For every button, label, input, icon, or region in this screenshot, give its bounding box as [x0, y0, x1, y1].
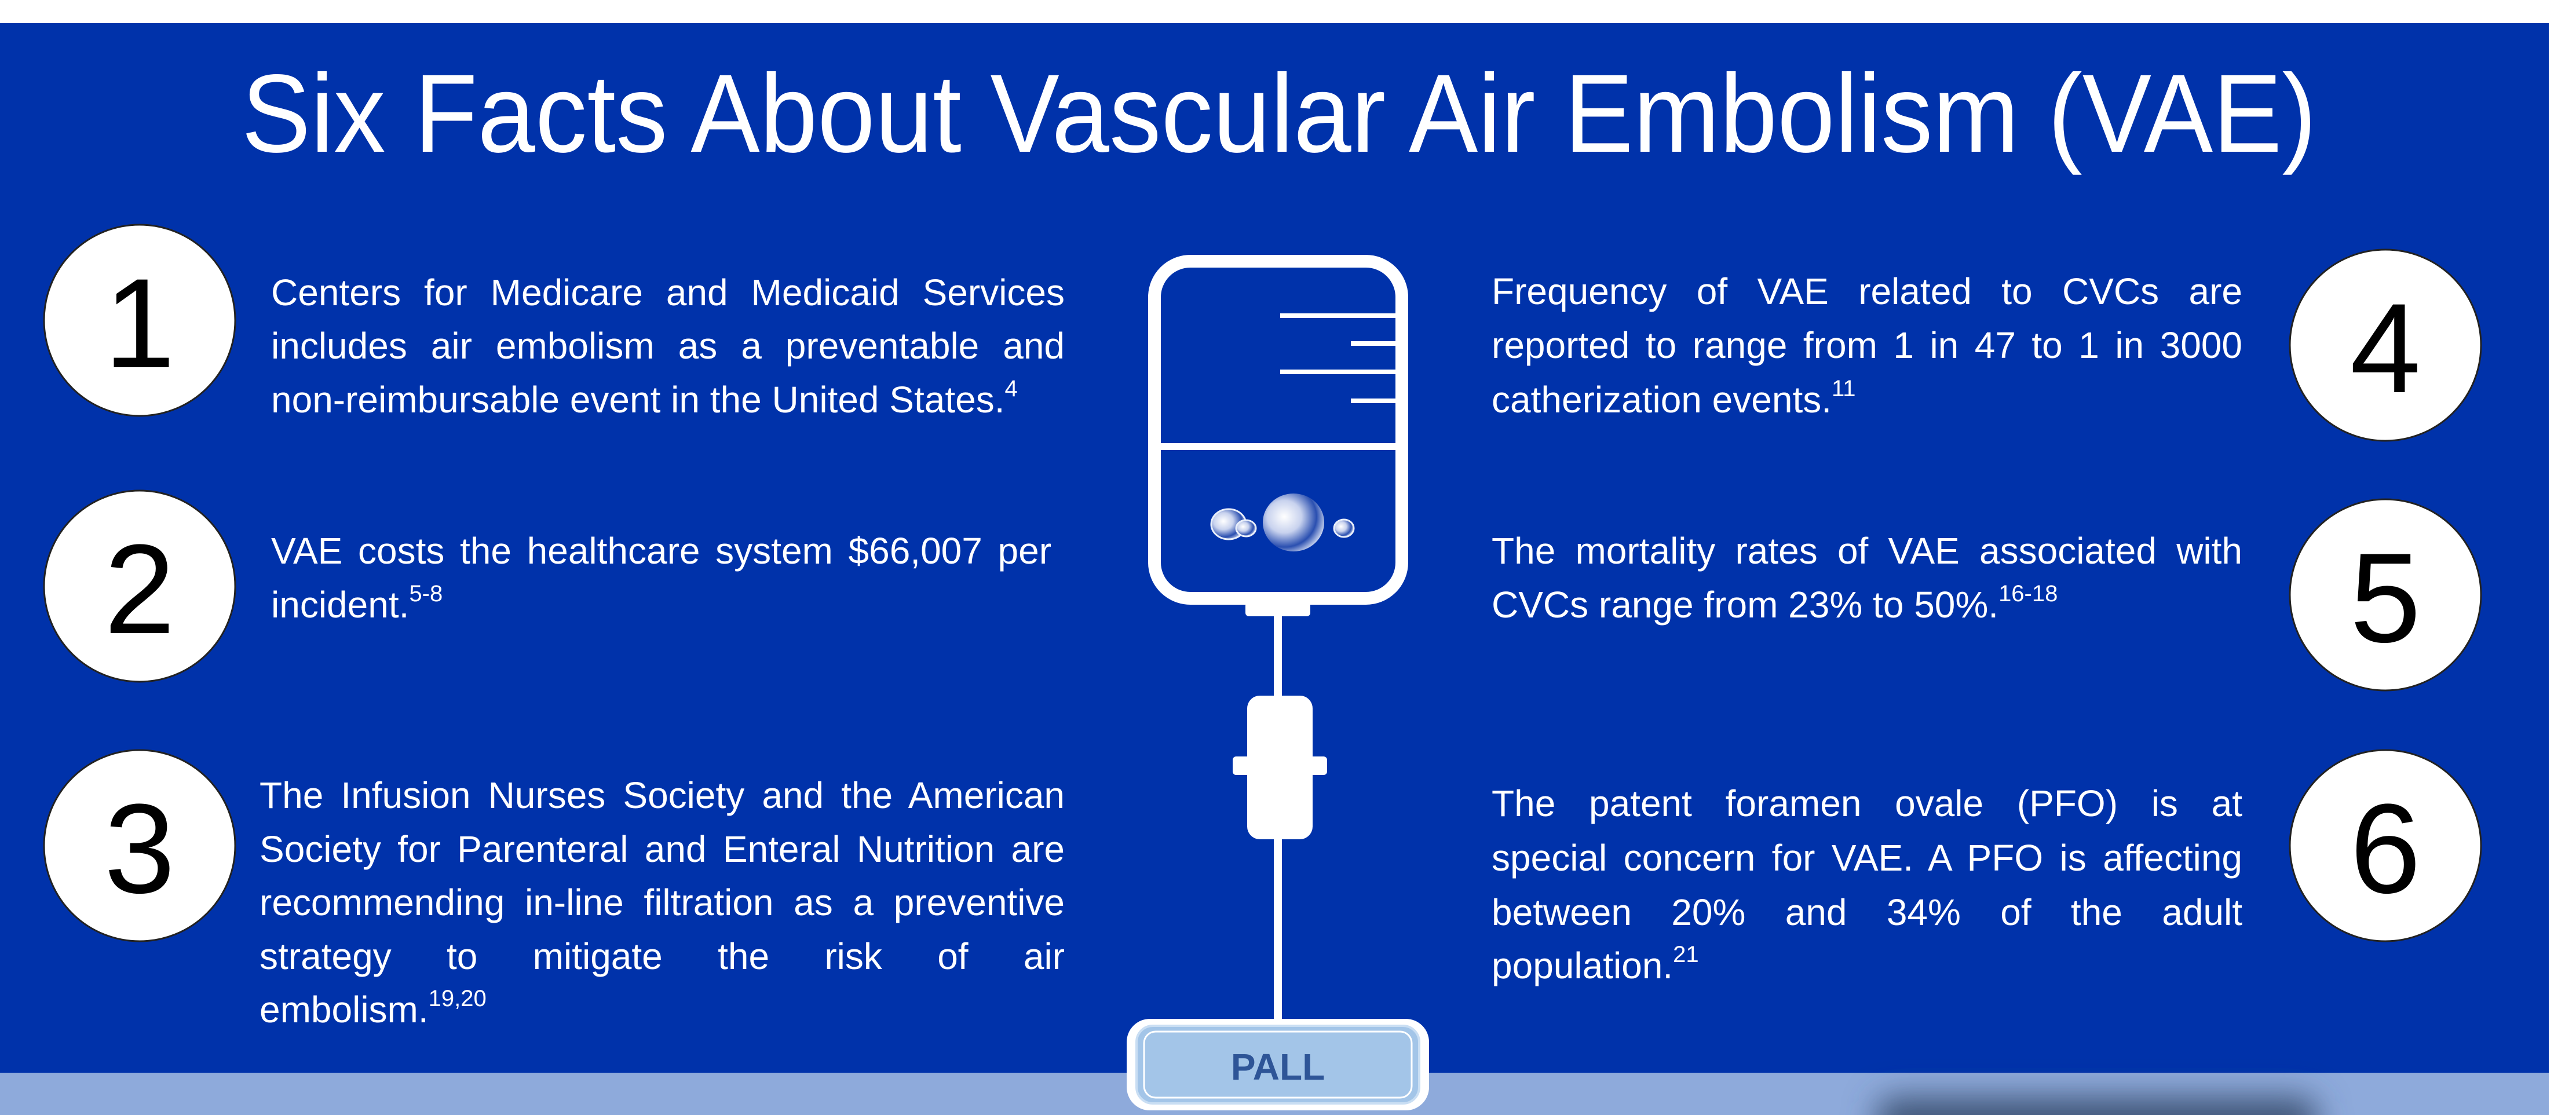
fact 3 text: embolism.19,20 [260, 986, 487, 1030]
circle 2 [44, 491, 235, 682]
fact 3 text: strategy to mitigate the risk of air [260, 935, 1065, 977]
fact 1 text: non-reimbursable event in the United States.4 [271, 376, 1018, 421]
fact 6 text: between 20% and 34% of the adult [1492, 891, 2242, 933]
fact 2 text: incident.5-8 [271, 581, 443, 626]
circle 1: 1 [104, 252, 175, 394]
fact 6 text: special concern for VAE. A PFO is affecting [1492, 837, 2242, 879]
fact 1 text: Centers for Medicare and Medicaid Services [271, 272, 1065, 313]
circle 6: 6 [2350, 777, 2421, 920]
circle 2: 2 [104, 518, 175, 660]
fact 5 text: The mortality rates of VAE associated with [1492, 530, 2242, 572]
fact 2 text [271, 530, 1051, 626]
circle 6 [2290, 750, 2481, 941]
fact 4 text: Frequency of VAE related to CVCs are [1492, 270, 2242, 312]
fact 4 text [1492, 270, 2242, 421]
fact 5 text: CVCs range from 23% to 50%.16-18 [1492, 581, 2058, 626]
shadow [1877, 1098, 2317, 1115]
fact 3 text: recommending in-line filtration as a preventive [260, 882, 1065, 923]
circle 1 [44, 225, 235, 416]
fact 1 text: includes air embolism as a preventable and [271, 325, 1065, 367]
fact 3 text: The Infusion Nurses Society and the American [260, 774, 1065, 816]
fact 2 text: VAE costs the healthcare system $66,007 per [271, 530, 1051, 572]
circle 3: 3 [104, 777, 175, 920]
circle 4 [2290, 250, 2481, 441]
label: PALL [1127, 1019, 1429, 1110]
icon: IV bag with filter [1154, 261, 1402, 1025]
bottom band [0, 1073, 2549, 1115]
fact 4 text: catherization events.11 [1492, 376, 1856, 421]
fact 5 text [1492, 530, 2242, 626]
circle 4: 4 [2350, 277, 2421, 419]
fact 6 text: population.21 [1492, 942, 1699, 986]
fact 4 text: reported to range from 1 in 47 to 1 in 3000 [1492, 324, 2242, 366]
circle 5 [2290, 499, 2481, 690]
fact 1 text [271, 272, 1065, 421]
fact 3 text: Society for Parenteral and Enteral Nutrition are [260, 828, 1065, 870]
fact 6 text: The patent foramen ovale (PFO) is at [1492, 783, 2242, 824]
fact 6 text [1492, 783, 2242, 986]
title: Six Facts About Vascular Air Embolism (VAE) [242, 51, 2316, 176]
label: PALL: PALL [1231, 1046, 1325, 1088]
fact 3 text [260, 774, 1065, 1030]
circle 3 [44, 750, 235, 941]
circle 5: 5 [2350, 527, 2421, 669]
